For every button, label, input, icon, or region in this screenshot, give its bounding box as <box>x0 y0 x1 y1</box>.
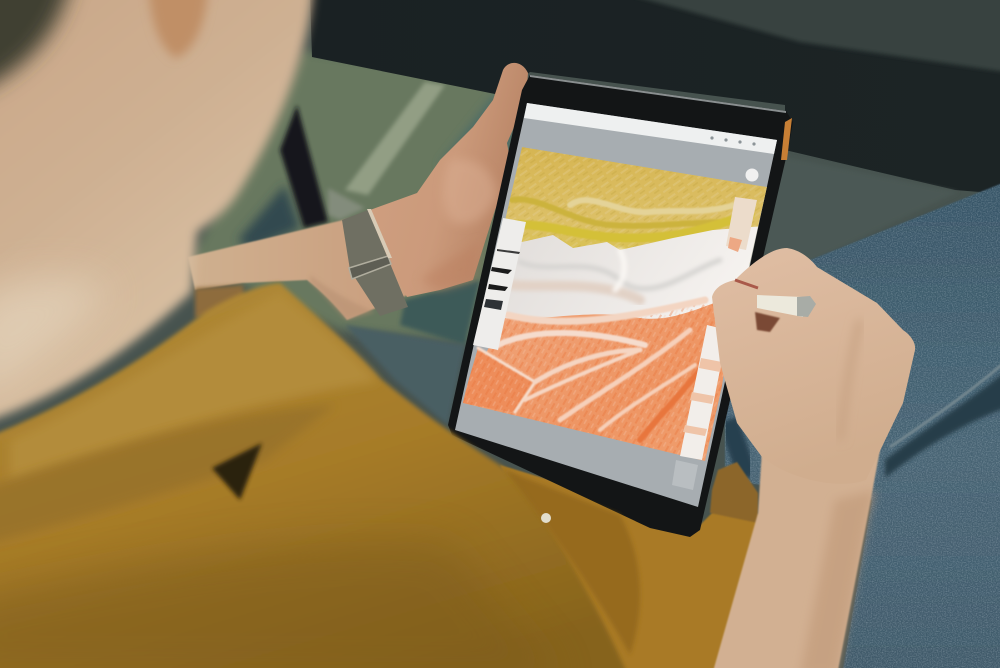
hair <box>0 0 75 100</box>
background: light streak <box>345 82 445 195</box>
head and neck <box>0 0 316 430</box>
background: dark strap <box>280 105 328 228</box>
shirt flap <box>710 462 758 523</box>
lower shadow <box>0 541 560 668</box>
background: grey seat <box>755 155 958 262</box>
neck highlight <box>0 278 110 400</box>
right hand <box>712 248 915 484</box>
color panel <box>672 197 757 490</box>
painting: orange hills <box>463 304 724 461</box>
shirt lower right <box>500 462 770 668</box>
background: teal shade near hand <box>440 95 520 200</box>
right forearm <box>712 450 880 668</box>
jeans under arm <box>345 325 465 425</box>
background: navy shadow <box>238 185 300 250</box>
painting <box>455 147 767 470</box>
shirt placket <box>505 470 640 655</box>
painting: white mountains <box>505 226 758 319</box>
toolbar icons <box>710 136 756 146</box>
watch band <box>342 209 408 316</box>
painting: yellow sky <box>495 147 767 270</box>
tablet body <box>448 75 793 537</box>
collar gap <box>212 443 262 500</box>
screen control dot <box>746 168 758 182</box>
stylus <box>757 295 816 317</box>
shirt button <box>541 513 551 523</box>
jeans seam <box>885 372 1000 478</box>
tablet <box>448 75 793 537</box>
painting: orange foreground hill <box>462 348 535 412</box>
background: dark bench <box>310 0 1000 194</box>
brush panel <box>473 218 526 350</box>
jeans right <box>725 182 1000 668</box>
shirt collar and back <box>0 283 640 668</box>
forearm left <box>188 212 420 320</box>
collar shadow <box>195 285 245 318</box>
collar highlight <box>10 292 378 480</box>
tablet screen <box>455 103 777 507</box>
ear <box>148 0 208 58</box>
left hand holding tablet <box>370 63 528 297</box>
background: green floor <box>190 50 530 345</box>
collar fold shadow <box>0 405 335 545</box>
toolbar white <box>524 103 777 154</box>
finger shadow <box>755 312 780 332</box>
